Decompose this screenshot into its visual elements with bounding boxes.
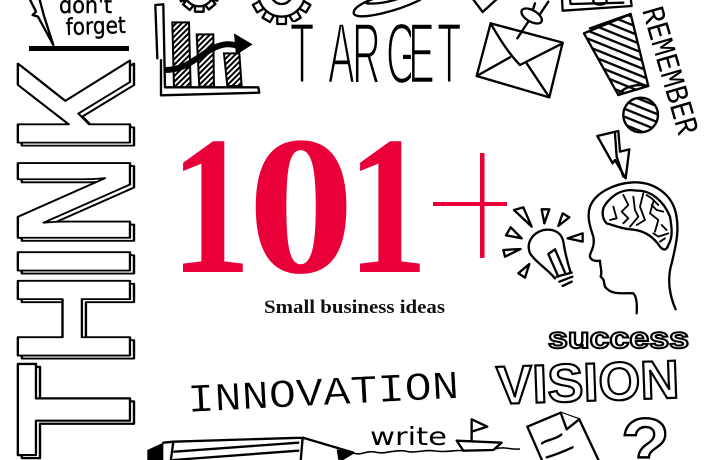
bar chart with arrow [155, 4, 259, 95]
brain [603, 190, 672, 249]
icon: head with brain [589, 182, 677, 313]
icon: paper boat [457, 419, 502, 451]
underline bar [29, 46, 129, 51]
number: 101 [170, 95, 428, 316]
text: don't forget [59, 0, 126, 41]
word: REMEMBER: REMEMBER [632, 2, 705, 140]
word: success: success [548, 322, 689, 355]
icon: oval disc [354, 0, 420, 16]
icon: small gear [179, 0, 220, 12]
subtitle: Small business ideas [264, 298, 445, 318]
icon: framed box [562, 0, 632, 11]
number: 101: 0 [248, 95, 355, 315]
word: INNOVATION: INNOVATION [186, 366, 460, 425]
icon: diamond [473, 0, 497, 12]
word: VISION: VISION [495, 350, 680, 416]
word: write: write [370, 422, 447, 451]
icon: light bulb [503, 207, 583, 286]
icon: lightning bolt [597, 131, 629, 178]
icon: document [527, 413, 600, 460]
text: don't forget: forget [65, 13, 126, 41]
icon: exclamation mark [584, 14, 658, 132]
icon: pen [29, 0, 53, 45]
word: TARGET: TARGET [290, 6, 461, 102]
squiggle line [353, 448, 520, 454]
icon: push pin [517, 2, 548, 38]
plus sign [433, 153, 507, 258]
icon: envelope [477, 23, 563, 97]
rays [503, 207, 583, 278]
icon: large gear [253, 0, 310, 24]
icon: pencil [147, 438, 353, 460]
number: 101: 1 [347, 97, 428, 316]
number: 101: 1 [170, 97, 251, 316]
